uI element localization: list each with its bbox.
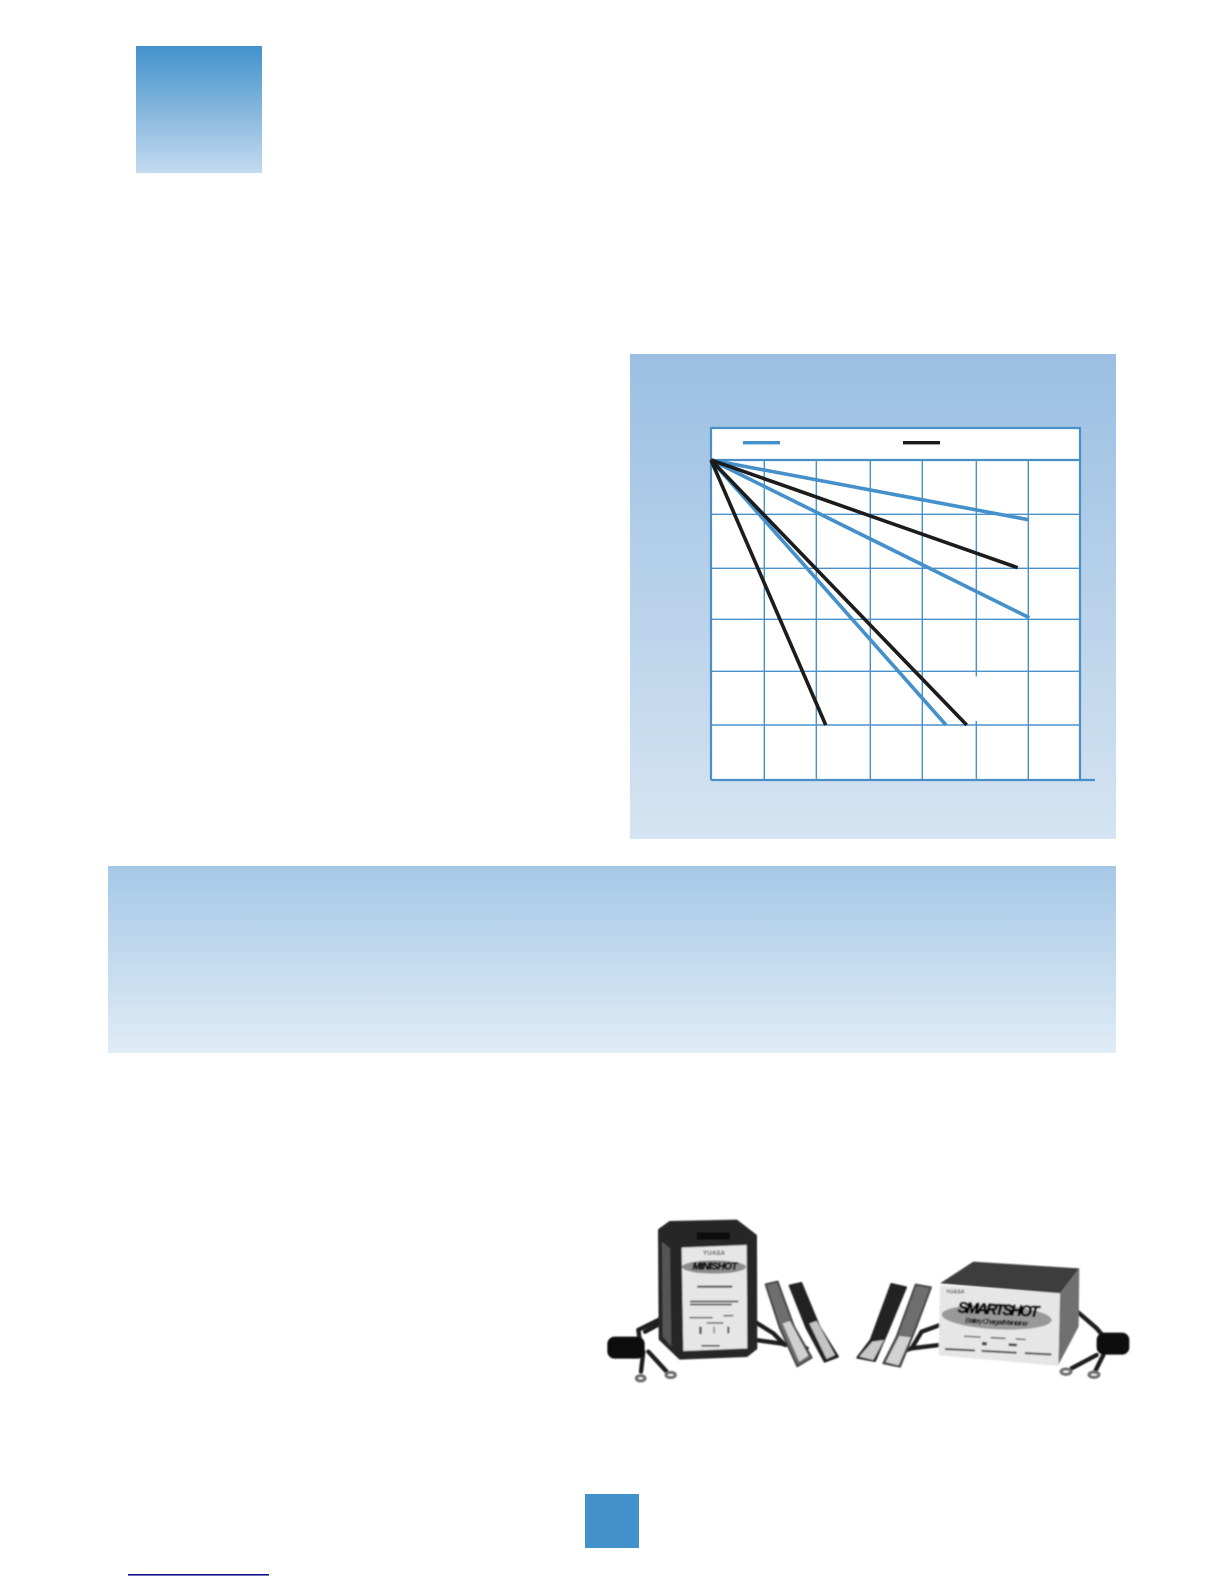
section number tab [136,46,262,173]
chart grid [711,460,1080,780]
line chart: self-discharge [711,428,1095,780]
ring terminals [1061,1369,1099,1377]
brand name: YUASA [946,1289,965,1295]
battery clips [766,1282,838,1366]
charger cables [897,1312,1105,1372]
label detail lines [945,1335,1052,1356]
label detail lines [689,1286,738,1347]
charger face label [682,1245,747,1351]
legend: black series key [903,441,940,444]
photo: large battery charger [857,1262,1129,1377]
brand name: YUASA [703,1250,725,1257]
photo: small battery charger [607,1221,838,1381]
charger top [940,1262,1079,1293]
footer link underline [128,1574,269,1576]
charger body [659,1221,756,1358]
charger side [662,1242,671,1347]
legend: blue series key [743,441,780,444]
charger vented side [1058,1268,1079,1365]
logo swoosh [941,1302,1052,1332]
plug connector [1097,1333,1129,1355]
panel: discharge chart background [630,354,1116,839]
callout band [108,866,1116,1053]
ring terminals [636,1372,675,1381]
product logo: MINISHOT [692,1261,738,1272]
product subtitle: Battery Charger/Maintainer [965,1316,1030,1328]
page number tab [585,1494,639,1548]
vent [697,1232,730,1240]
product logo [682,1260,746,1274]
chart frame and axes [711,428,1095,780]
plug connector [607,1337,645,1359]
charger cables [638,1319,807,1372]
chart plot background [711,428,1080,780]
charger face [939,1285,1060,1366]
blue series lines [711,460,1029,725]
battery clips [857,1284,931,1367]
black series lines [711,460,1018,725]
product logo: SMARTSHOT [957,1300,1041,1321]
